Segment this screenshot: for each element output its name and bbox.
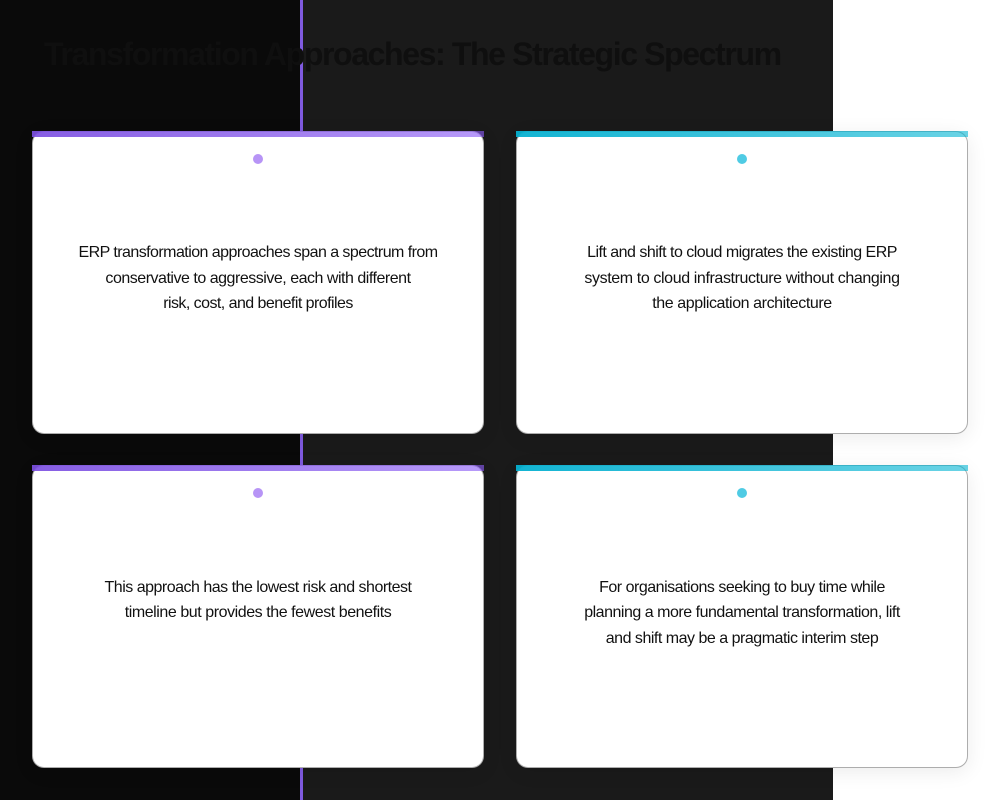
text: risk and timeline: timeline but provides the fewest benefits [125, 604, 391, 621]
vertical accent line [300, 0, 303, 800]
text: spectrum overview: conservative to aggressive, each with different [105, 270, 411, 287]
text: spectrum overview: risk, cost, and benefit profiles [163, 295, 353, 312]
text: lift and shift definition [584, 244, 900, 312]
icon: purple dot [253, 154, 263, 164]
icon: purple dot [253, 488, 263, 498]
top accent bar: purple [32, 131, 484, 137]
text: risk and timeline [104, 579, 412, 621]
text: lift and shift definition: Lift and shift to cloud migrates the existing ERP [587, 244, 897, 261]
text: spectrum overview [78, 244, 438, 312]
text: risk and timeline: This approach has the lowest risk and shortest [105, 579, 411, 596]
text: spectrum overview: ERP transformation approaches span a spectrum from [78, 244, 438, 261]
title: Transformation Approaches: The Strategic Spectrum [44, 36, 781, 72]
text: interim step: and shift may be a pragmatic interim step [606, 630, 878, 647]
panel: risk and timeline card [32, 465, 484, 772]
icon: cyan dot [737, 488, 747, 498]
panel: lift and shift card [516, 131, 970, 440]
background panel: charcoal section [303, 0, 833, 800]
top accent bar: cyan [516, 465, 968, 471]
icon: cyan dot [737, 154, 747, 164]
card face [32, 465, 484, 768]
text: lift and shift definition: system to cloud infrastructure without changing [584, 270, 900, 287]
text: lift and shift definition: the application architecture [652, 295, 832, 312]
card face [516, 131, 968, 434]
card face [32, 131, 484, 434]
top accent bar: cyan [516, 131, 968, 137]
panel: spectrum overview card [32, 131, 484, 438]
panel: interim step card [516, 465, 970, 774]
text: interim step: For organisations seeking to buy time while [599, 579, 885, 596]
text: interim step: planning a more fundamental transformation, lift [584, 604, 900, 621]
card face [516, 465, 968, 768]
text: interim step [584, 579, 900, 647]
top accent bar: purple [32, 465, 484, 471]
background panel: black left section [0, 0, 300, 800]
